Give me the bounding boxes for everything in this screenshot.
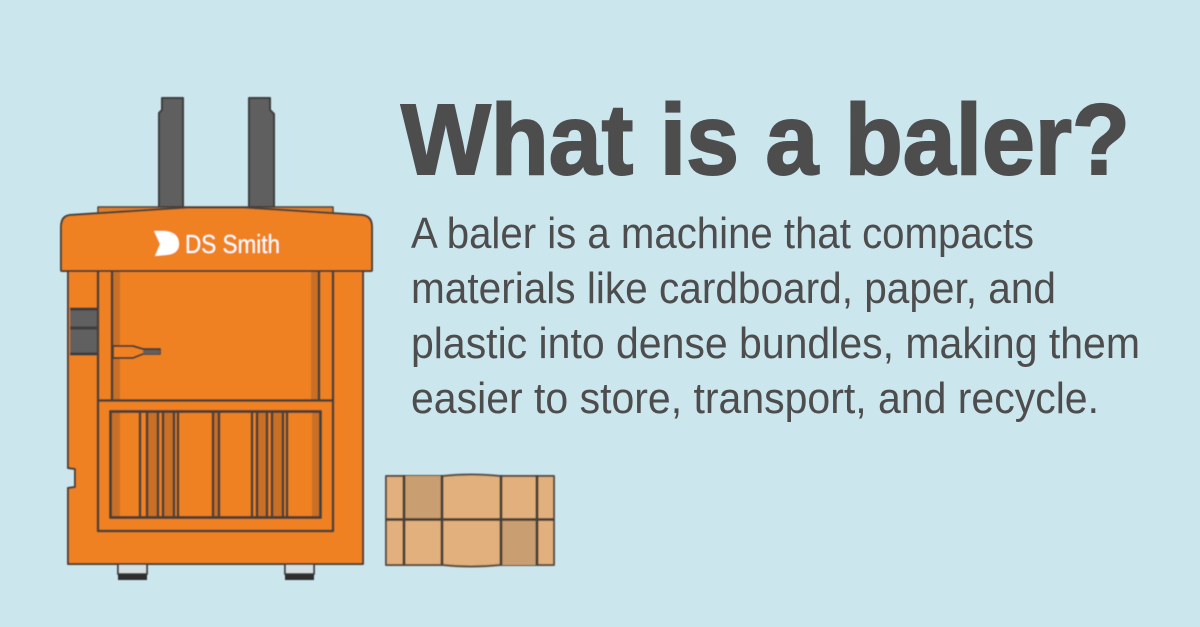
baler lower window	[110, 412, 320, 518]
baler top tray	[98, 207, 333, 215]
icon: cardboard bale	[386, 474, 554, 566]
DS Smith logo: DS Smith	[185, 229, 280, 259]
bale shaded panels	[405, 476, 442, 519]
title: What is a baler?	[401, 84, 1130, 196]
baler guide posts	[159, 98, 274, 207]
baler door handle	[113, 346, 160, 358]
DS Smith logo	[154, 229, 280, 259]
baler door shading	[113, 271, 120, 400]
description text: easier to store, transport, and recycle.	[411, 374, 1099, 423]
bale strapping	[386, 475, 554, 565]
baler body	[68, 270, 363, 564]
description text: materials like cardboard, paper, and	[411, 264, 1056, 313]
baler feet	[118, 565, 314, 580]
icon: baler machine	[61, 98, 372, 580]
description text: A baler is a machine that compacts	[411, 209, 1034, 258]
baler side latch	[70, 309, 98, 354]
description text	[411, 209, 1140, 423]
baler door frame lines	[98, 271, 333, 531]
description text: plastic into dense bundles, making them	[411, 319, 1140, 368]
baler lid	[61, 208, 372, 271]
